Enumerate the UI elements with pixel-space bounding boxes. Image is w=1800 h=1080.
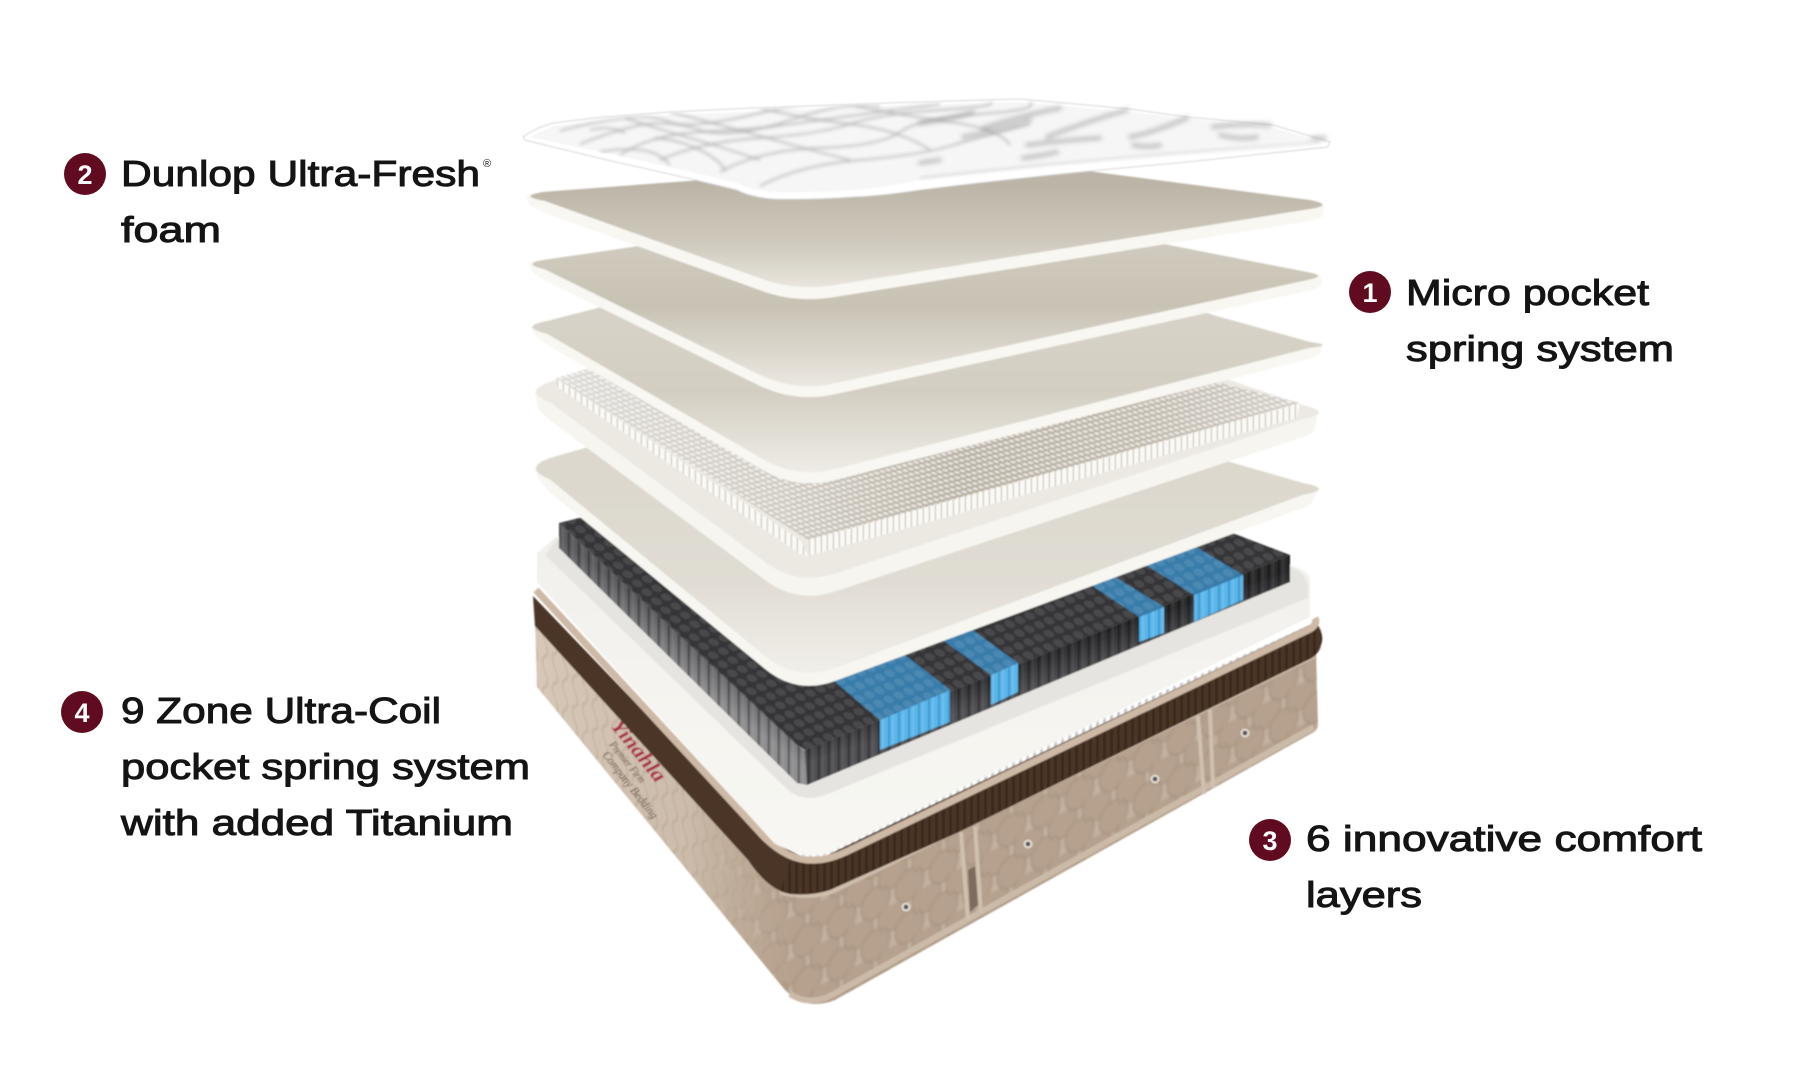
brand logo: Premier Firm [606,739,647,786]
comfort layer 1 [526,158,1324,299]
latex pips top [556,302,1300,540]
label 4 line 1: 9 Zone Ultra-Coil [121,690,441,731]
label 2 line 1: Dunlop Ultra-Fresh [121,153,480,194]
callout 3: comfort layers [1249,818,1702,915]
base left face [535,615,830,1004]
label 1 line 2: spring system [1406,328,1674,369]
callout 4: 9 Zone [61,690,530,843]
comfort layer 5 [535,425,1319,686]
blue zone 2 [922,615,1018,705]
callout 2: Dunlop foam [64,153,491,250]
brand logo: Yinahla [606,714,671,787]
badge 4: 4 [74,698,90,728]
badge 1: 1 [1362,278,1378,308]
callout 1: Micro pocket [1349,271,1674,369]
comfort layer 2 [529,200,1322,397]
pad surface tint [530,102,1320,192]
brand logo [600,714,671,821]
blue zone 3 [1070,563,1164,642]
springs top [559,450,1290,750]
brand logo: Company Bedding [600,748,661,821]
label 2 line 2: foam [121,209,221,250]
strap handle front [961,826,981,920]
base top piping [780,656,1314,896]
latex pips side faces [556,378,808,556]
badge 3: 3 [1262,826,1278,856]
badge 2: 2 [77,160,93,190]
strap handle right [1198,710,1213,794]
comfort layer 3 [531,220,1322,483]
grommets [903,730,1248,910]
badge 1 [1349,271,1391,313]
badge 2 [64,153,106,195]
label 3 line 2: layers [1306,874,1422,915]
blue zone 4 [1122,532,1243,622]
label 3 line 1: 6 innovative comfort [1306,818,1702,859]
label 4 line 2: pocket spring system [121,746,530,787]
foam inner surface [545,530,1308,798]
pocket spring unit [559,450,1290,785]
badge 4 [61,691,103,733]
beige piping [536,590,1316,860]
base right face quilting [710,654,1319,1005]
springs left face [559,523,807,785]
base: quilted foundation [535,615,1330,1020]
quilted top pad [523,99,1330,199]
pad dark wisps [920,108,1325,163]
white foam base [537,530,1310,855]
springs front face [805,555,1290,785]
brown ribbed band [533,596,1322,894]
label 1 line 1: Micro pocket [1406,272,1649,313]
latex pincore layer [535,302,1319,596]
badge 3 [1249,819,1291,861]
registered mark: ® [483,158,491,170]
pad rim line [920,142,1320,178]
mattress exploded diagram [523,99,1330,1020]
blue zone 1 [815,640,950,750]
base bottom piping [790,727,1314,1001]
label 4 line 3: with added Titanium [120,802,513,843]
pad quilting seams [560,102,1031,186]
